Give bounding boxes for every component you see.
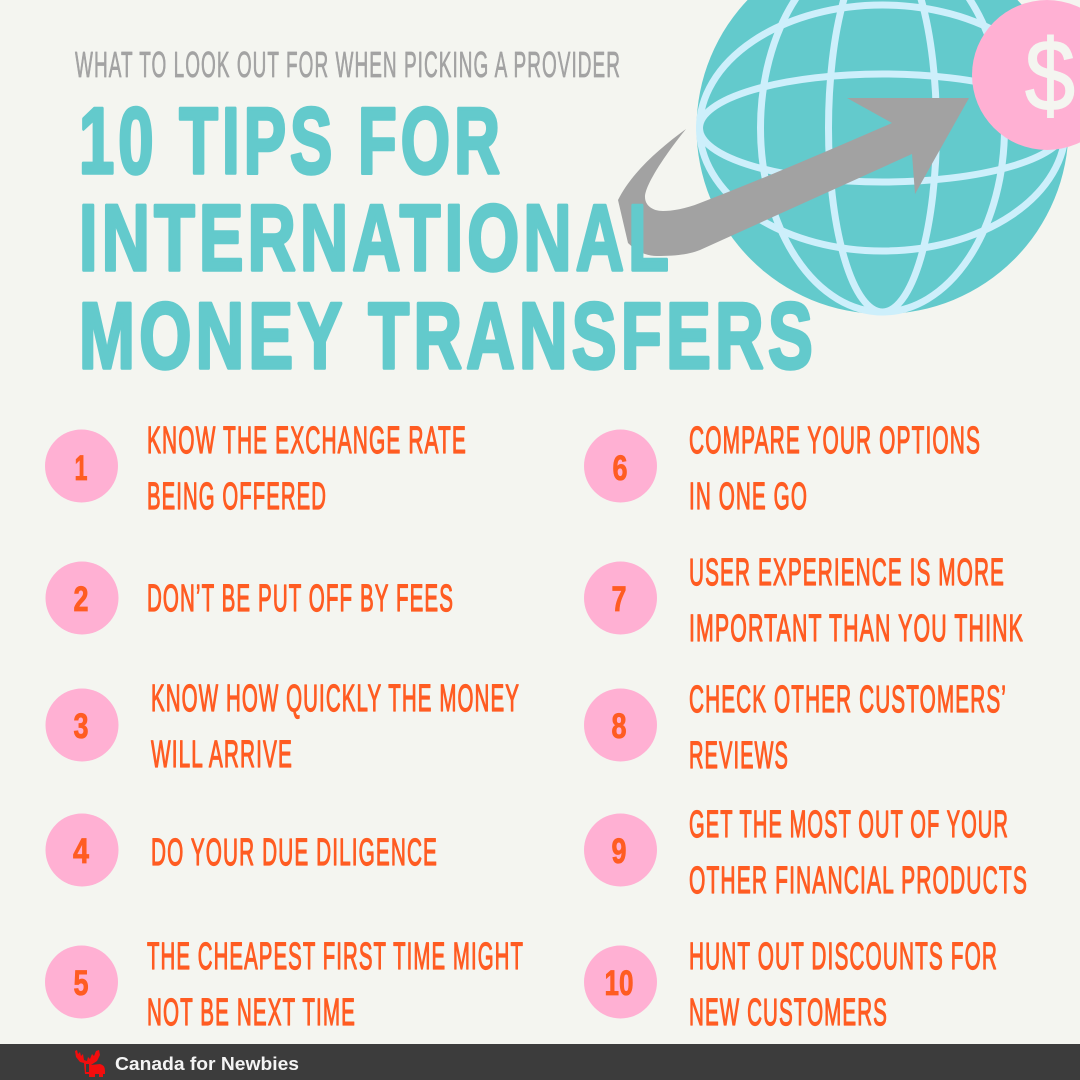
tip 5: THE CHEAPEST FIRST TIME MIGHT (147, 936, 524, 978)
tip 6 (584, 420, 981, 518)
tip 3: KNOW HOW QUICKLY THE MONEY (151, 678, 520, 720)
tip 3: WILL ARRIVE (151, 734, 293, 776)
tip 4: 4 (73, 832, 89, 871)
tip 9: 9 (612, 832, 626, 871)
tip 5: NOT BE NEXT TIME (147, 992, 356, 1034)
tip 10: NEW CUSTOMERS (689, 992, 888, 1034)
tip 3: 3 (74, 707, 88, 746)
tip 3 (46, 678, 520, 776)
tip 6: IN ONE GO (689, 476, 808, 518)
tip 2: DON’T BE PUT OFF BY FEES (147, 578, 454, 620)
footer bar (0, 1044, 1080, 1080)
tip 1: BEING OFFERED (147, 476, 327, 518)
tip 10: 10 (604, 964, 634, 1003)
tip 4: DO YOUR DUE DILIGENCE (151, 832, 438, 874)
title: INTERNATIONAL (79, 185, 673, 290)
footer brand name: Canada for Newbies (115, 1053, 299, 1074)
tip 1: 1 (74, 449, 88, 488)
tip 5: 5 (74, 964, 88, 1003)
tip 1 (45, 420, 467, 518)
title (79, 88, 817, 388)
tip 7 (584, 552, 1024, 650)
icon: globe (696, 0, 1068, 314)
tip 2 (46, 562, 454, 634)
title: 10 TIPS FOR (79, 88, 504, 193)
tip 2: 2 (74, 580, 88, 619)
tip 8: REVIEWS (689, 735, 789, 777)
tip 4 (46, 814, 438, 886)
tip 10 (584, 936, 998, 1034)
icon: dollar coin (972, 0, 1080, 150)
tip 8: 8 (612, 707, 626, 746)
icon: dollar coin: $ (1025, 20, 1075, 132)
icon: moose logo (75, 1050, 105, 1077)
tip 8 (584, 679, 1007, 777)
tip 7: 7 (612, 580, 626, 619)
tip 1: KNOW THE EXCHANGE RATE (147, 420, 467, 462)
tip 5 (45, 936, 524, 1034)
tip 6: 6 (612, 449, 628, 488)
tip 9 (584, 804, 1028, 902)
arrow (618, 98, 969, 256)
